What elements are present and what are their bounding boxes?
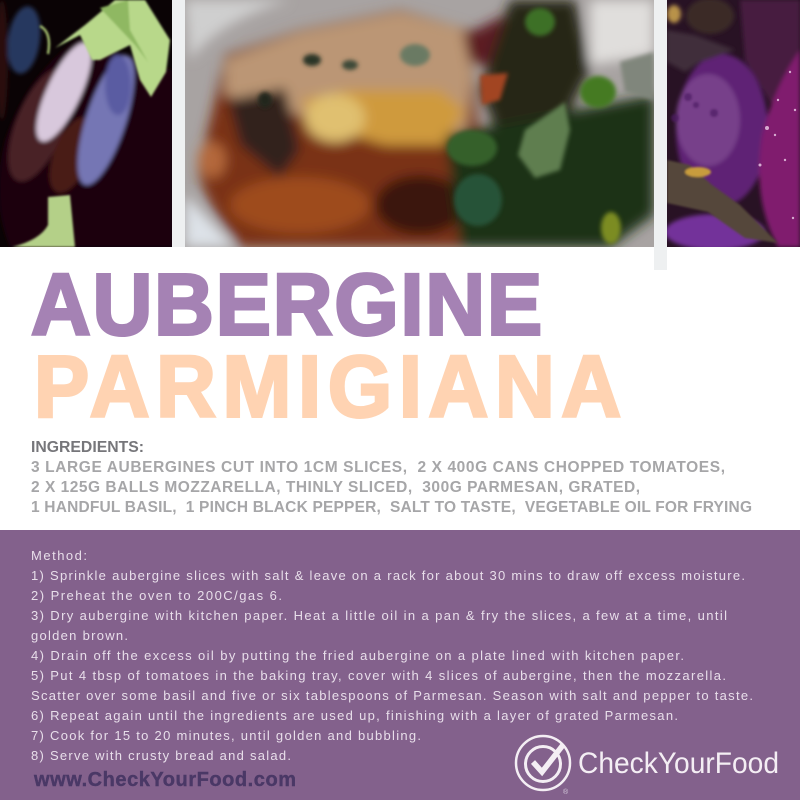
ingredients list (31, 459, 752, 516)
ingredients list: 1 HANDFUL BASIL, 1 PINCH BLACK PEPPER, SALT TO TASTE, VEGETABLE OIL FOR FRYING (31, 499, 752, 516)
icon: check circle (516, 736, 570, 790)
title (31, 256, 621, 435)
title line: Parmigiana: PARMIGIANA (34, 338, 621, 435)
ingredients heading: INGREDIENTS: (31, 439, 144, 456)
photo: black aubergine (0, 0, 172, 247)
ingredients list: 3 LARGE AUBERGINES CUT INTO 1CM SLICES, 2 X 400G CANS CHOPPED TOMATOES, (31, 459, 725, 476)
method text: 6) Repeat again until the ingredients are used up, finishing with a layer of grated Parmesan. (31, 708, 678, 723)
photo: purple aubergines (665, 0, 800, 250)
method text (31, 548, 753, 763)
method text: 4) Drain off the excess oil by putting the fried aubergine on a plate lined with kitchen paper. (31, 648, 684, 663)
panel: method (0, 530, 800, 800)
ingredients (31, 439, 752, 516)
method text: 1) Sprinkle aubergine slices with salt & leave on a rack for about 30 mins to draw off excess moisture. (31, 568, 745, 583)
photo: aubergine parmigiana on plate (185, 0, 654, 247)
method text: Scatter over some basil and five or six tablespoons of Parmesan. Season with salt and pepper to taste. (31, 688, 753, 703)
logo: CheckYourFood (516, 736, 779, 796)
logo wordmark: CheckYourFood (578, 747, 779, 780)
method text: 8) Serve with crusty bread and salad. (31, 748, 291, 763)
method text: Method: (31, 548, 87, 563)
method text: 2) Preheat the oven to 200C/gas 6. (31, 588, 282, 603)
method text: 3) Dry aubergine with kitchen paper. Heat a little oil in a pan & fry the slices, a few at a time, until (31, 608, 727, 623)
website url: www.CheckYourFood.com (33, 769, 296, 791)
title line: Aubergine: AUBERGINE (31, 256, 542, 353)
photo strip divider (172, 0, 667, 270)
method text: 7) Cook for 15 to 20 minutes, until golden and bubbling. (31, 728, 421, 743)
ingredients list: 2 X 125G BALLS MOZZARELLA, THINLY SLICED, 300G PARMESAN, GRATED, (31, 479, 640, 496)
method text: 5) Put 4 tbsp of tomatoes in the baking tray, cover with 4 slices of aubergine, then the mozzarella. (31, 668, 726, 683)
registered mark: ® (563, 788, 569, 796)
method text: golden brown. (31, 628, 128, 643)
